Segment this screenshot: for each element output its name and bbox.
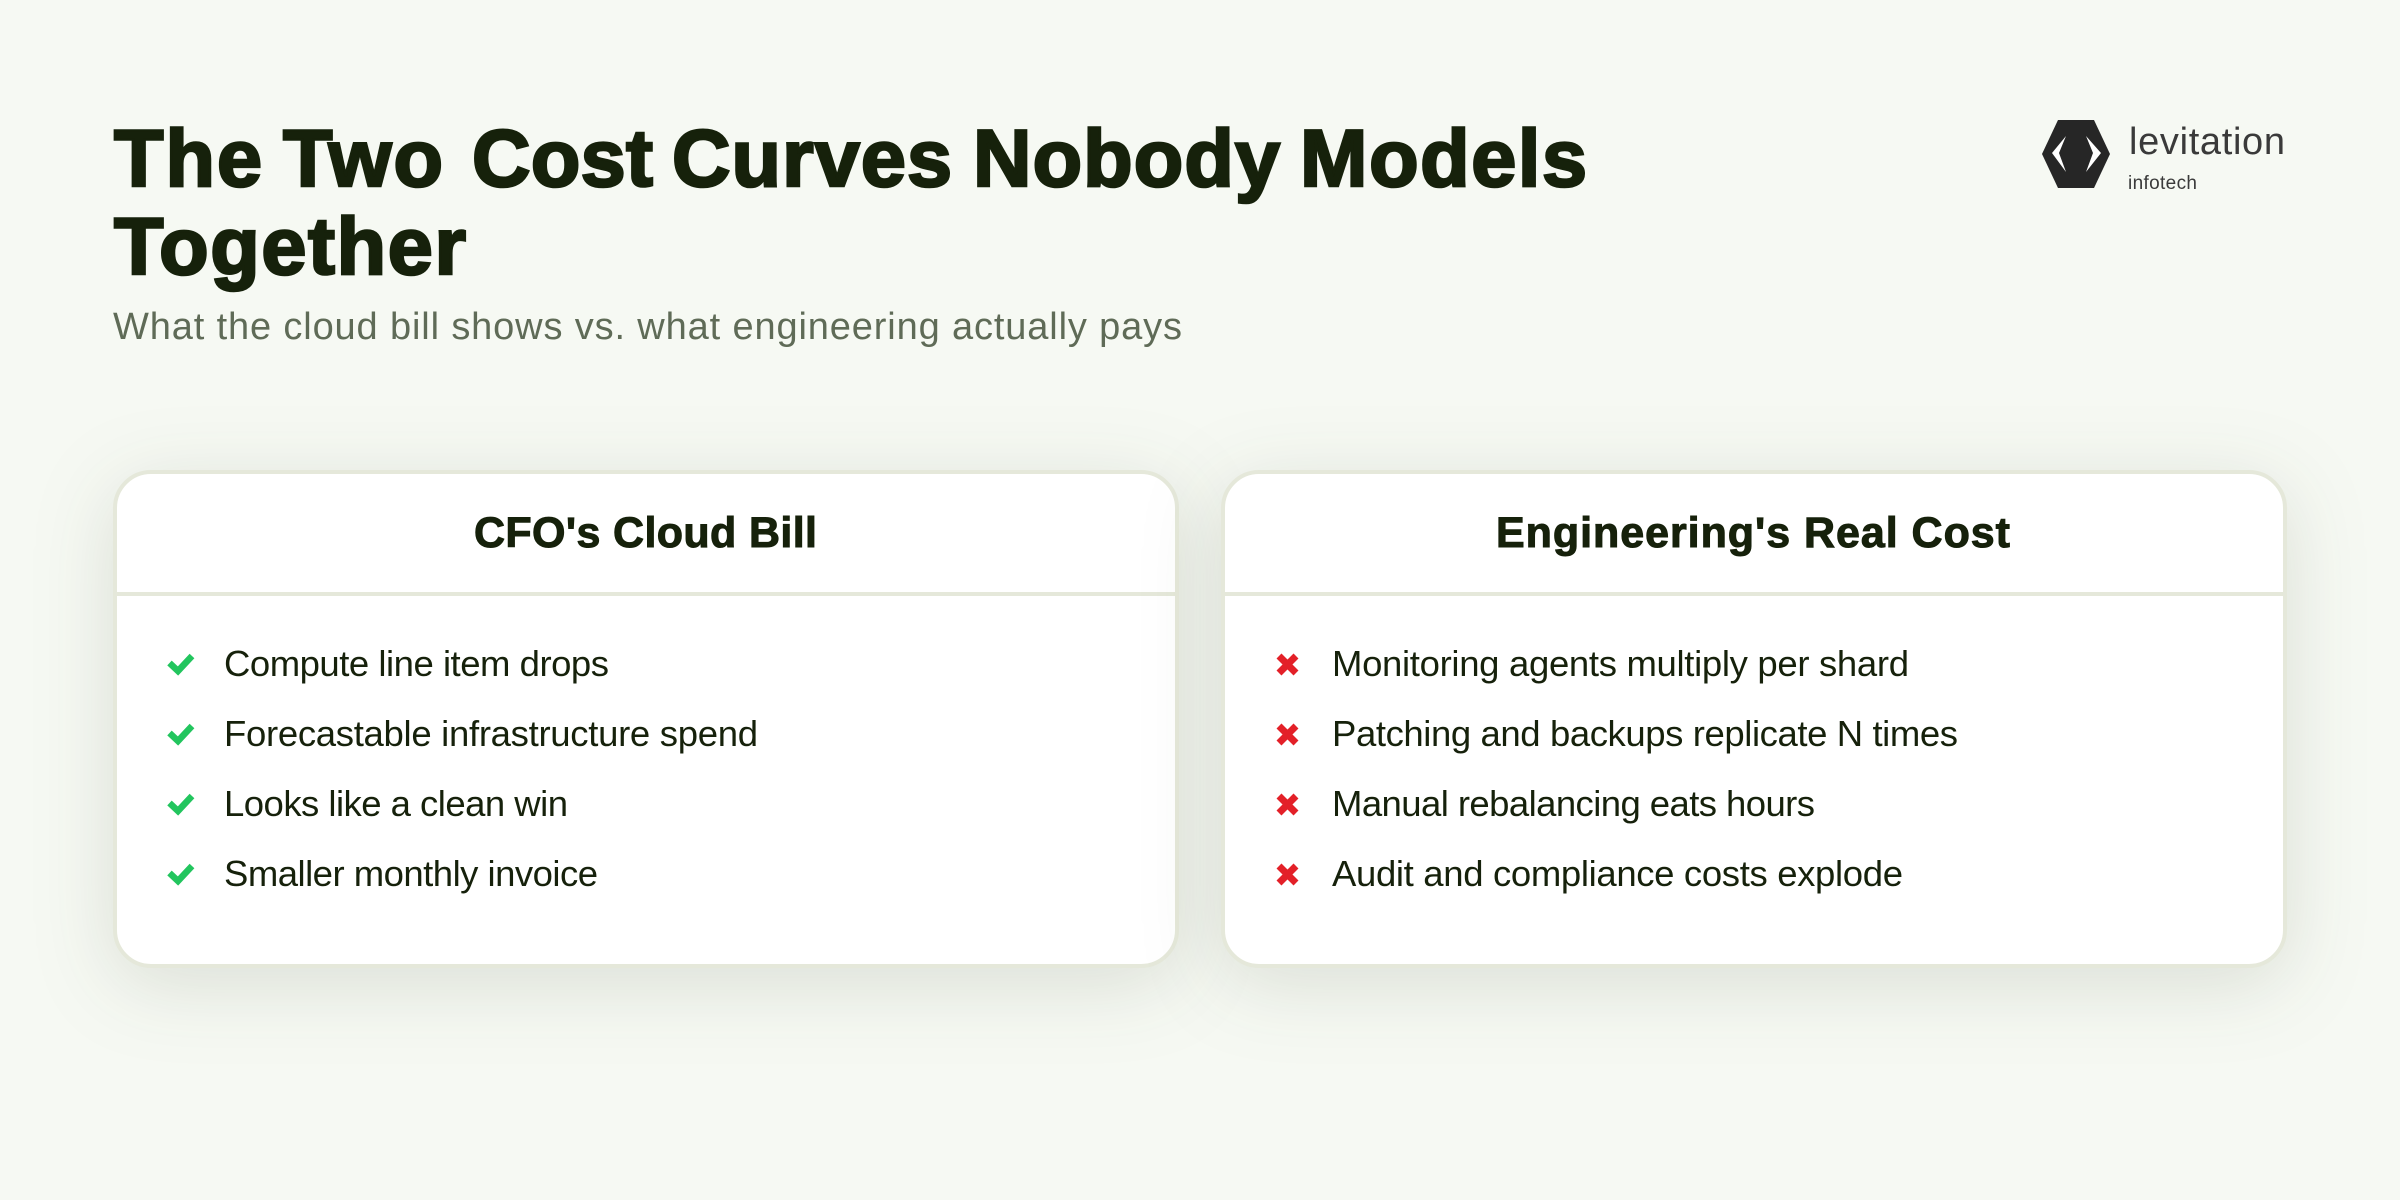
logo wordmark: levitation xyxy=(2129,121,2285,163)
title: Curves xyxy=(672,114,952,204)
card background xyxy=(115,472,1177,966)
list item: Monitoring agents multiply per shard: Monitoring agents multiply per shard xyxy=(1332,643,1909,684)
logo tagline: infotech xyxy=(2128,173,2197,194)
list item: Manual rebalancing eats hours: Manual rebalancing eats hours xyxy=(1332,783,1815,824)
icon: hexagon mark xyxy=(2042,120,2110,188)
title: Together xyxy=(114,202,466,292)
list item: Smaller monthly invoice: Smaller monthly invoice xyxy=(224,853,598,894)
list item: Patching and backups replicate N times: Patching and backups replicate N times xyxy=(1332,713,1958,754)
panel: Engineering's Real Cost xyxy=(1223,472,2285,966)
logo: levitation infotech xyxy=(2042,120,2285,194)
list item: Looks like a clean win: Looks like a clean win xyxy=(224,783,568,824)
title: Cost xyxy=(472,114,653,204)
heading: CFO's Cloud Bill: CFO's Cloud Bill xyxy=(474,509,817,557)
panel: CFO's Cloud Bill xyxy=(115,472,1177,966)
title: Models xyxy=(1300,114,1587,204)
list item: Compute line item drops: Compute line item drops xyxy=(224,643,609,684)
list item: Audit and compliance costs explode: Audit and compliance costs explode xyxy=(1332,853,1903,894)
list item: Forecastable infrastructure spend: Forecastable infrastructure spend xyxy=(224,713,758,754)
title: Two xyxy=(283,114,443,204)
heading: Engineering's Real Cost: Engineering's Real Cost xyxy=(1496,509,2010,557)
subtitle: What the cloud bill shows vs. what engineering actually pays xyxy=(113,306,1182,348)
title xyxy=(114,114,1587,292)
title: Nobody xyxy=(973,114,1280,204)
title: The xyxy=(114,114,262,204)
card background xyxy=(1223,472,2285,966)
